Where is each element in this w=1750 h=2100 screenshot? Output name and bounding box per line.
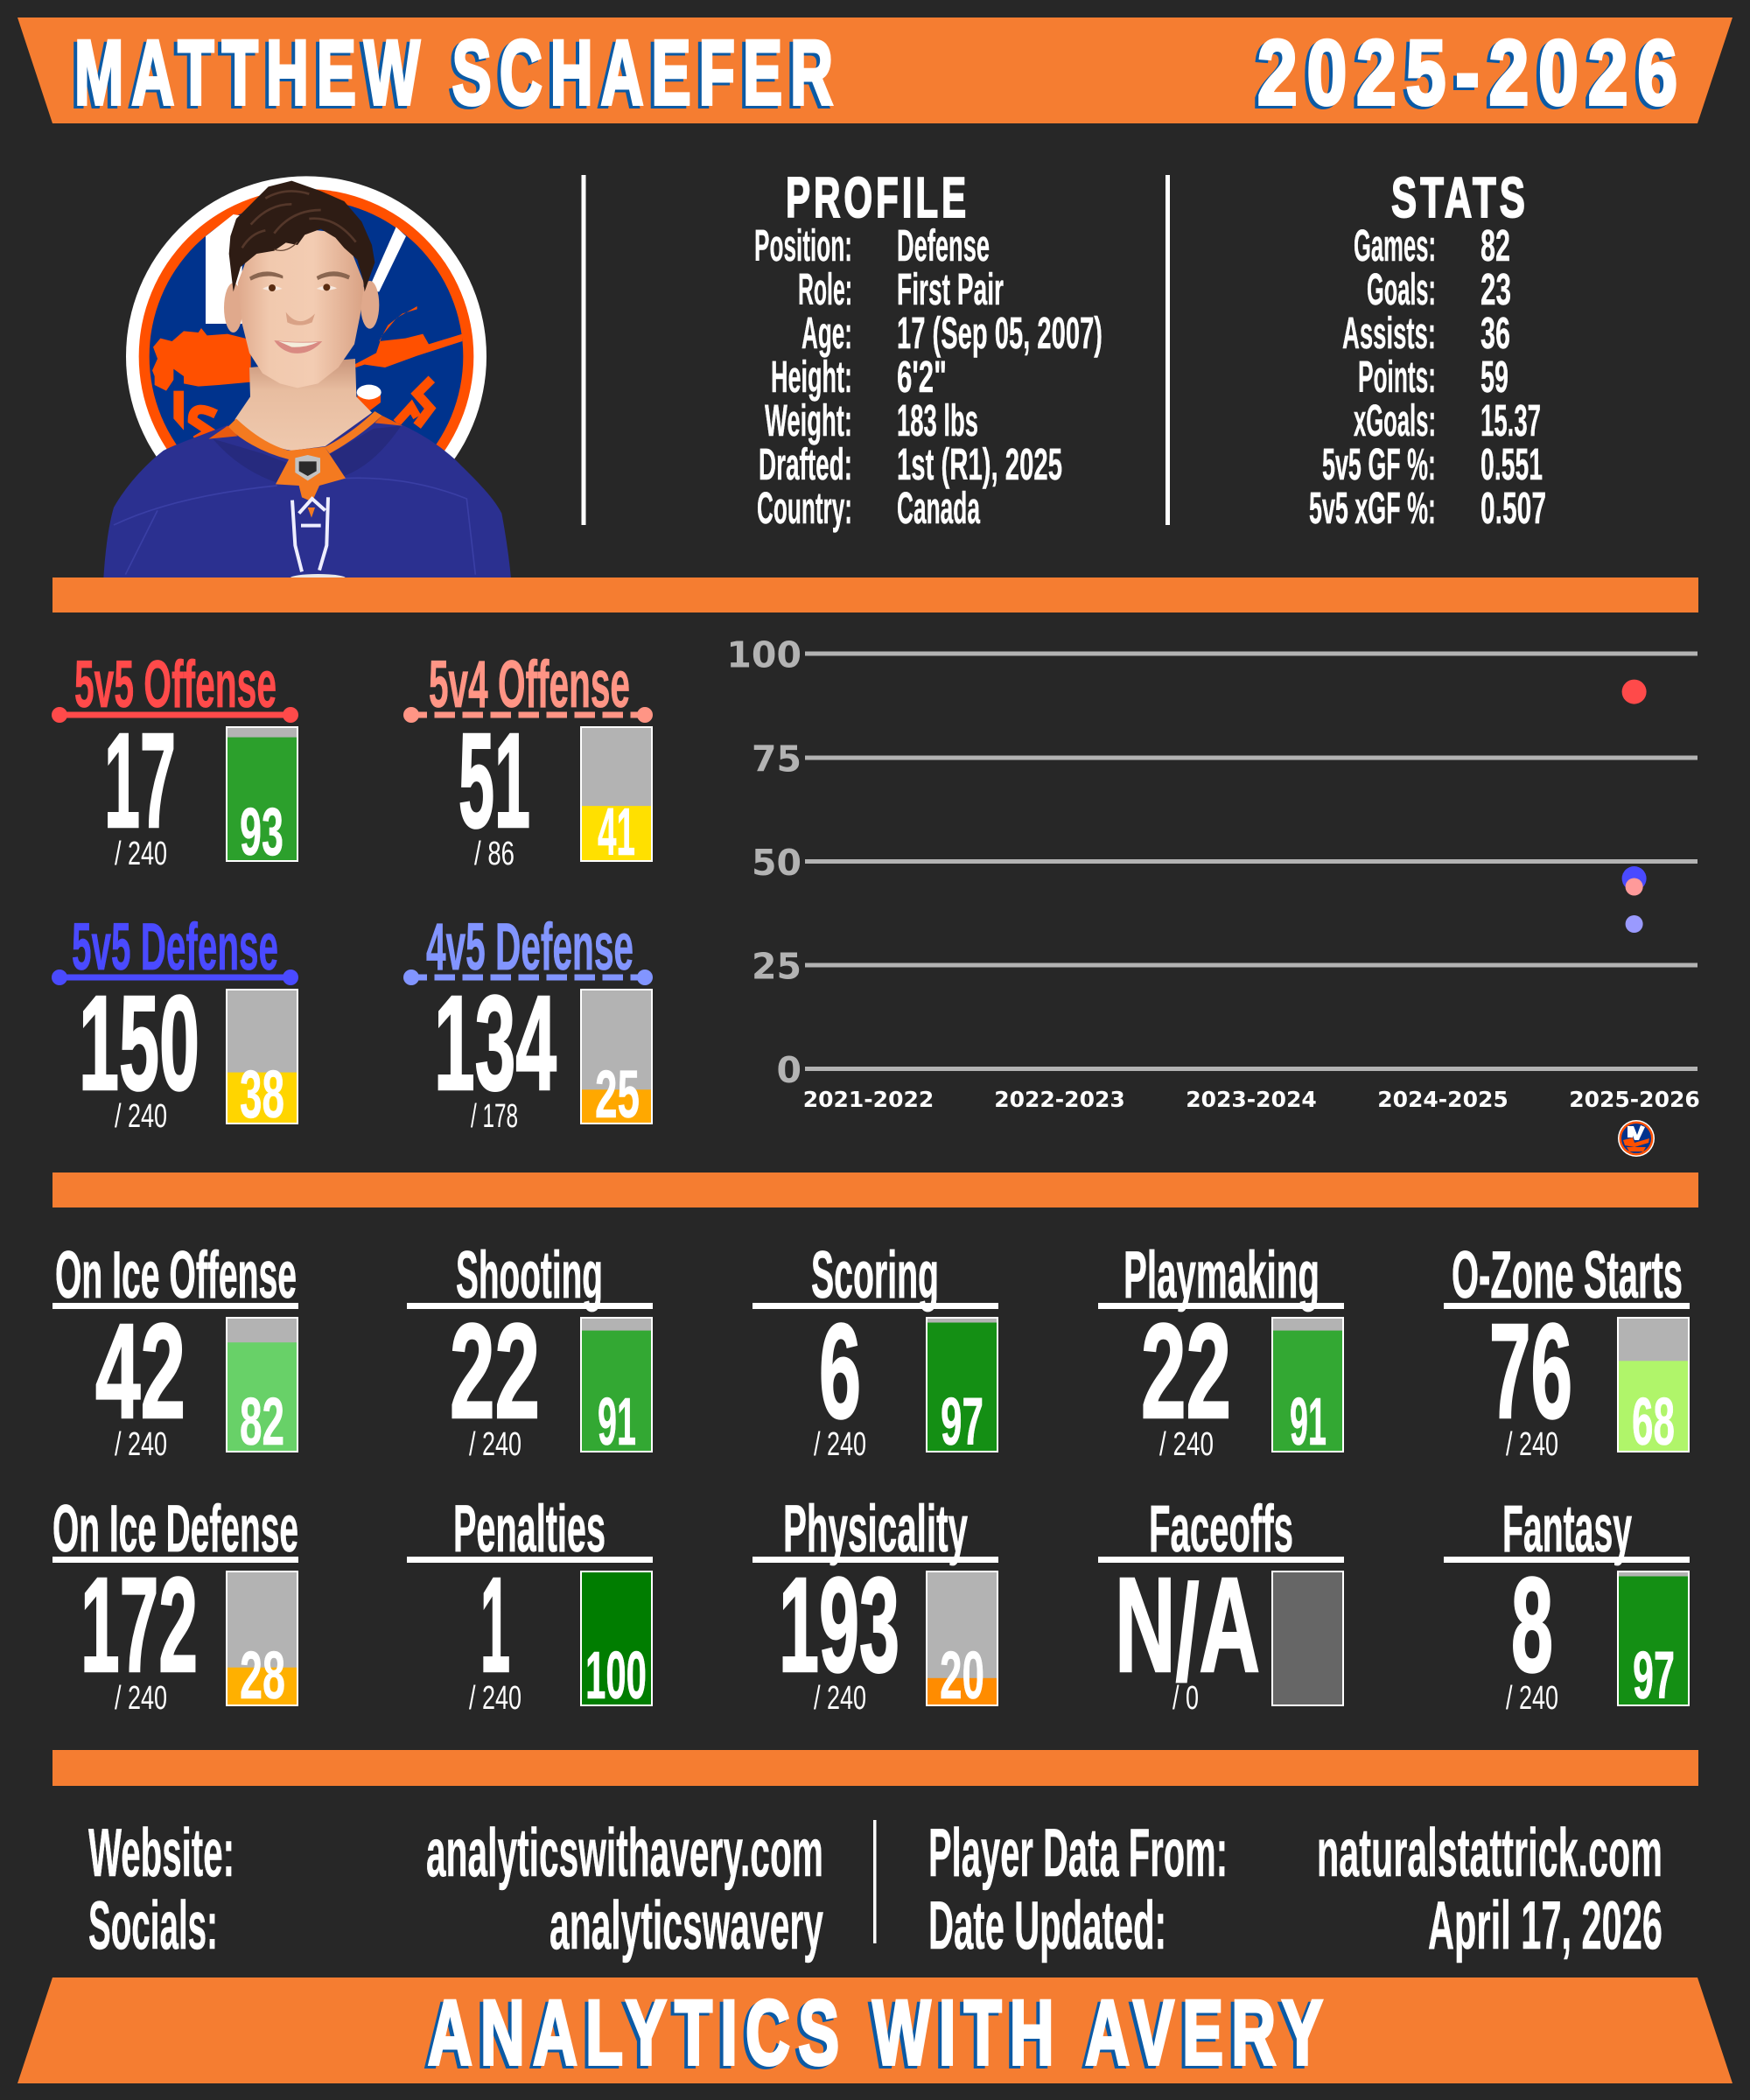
heading: Physicality <box>783 1492 968 1566</box>
percentile bar: 93 <box>240 794 284 870</box>
x axis labels <box>803 1087 1700 1112</box>
rank: 134 <box>434 968 556 1118</box>
panel: profile: Drafted: <box>759 439 852 489</box>
panel: on ice defense <box>52 1492 298 1717</box>
neck <box>234 359 372 451</box>
credits: left <box>88 1814 823 1964</box>
percentile bar <box>580 1317 653 1460</box>
panel: stats <box>1309 165 1546 533</box>
x axis labels: 2024-2025 <box>1377 1087 1508 1112</box>
orange band <box>52 1172 1698 1208</box>
y axis labels: 0 <box>776 1049 802 1091</box>
rank: 172 <box>80 1550 198 1700</box>
percentile bar <box>226 726 298 870</box>
rank: 76 <box>1489 1296 1572 1446</box>
heading: Playmaking <box>1124 1238 1320 1312</box>
rank: / <box>1176 1558 1199 1708</box>
panel: profile: Age: <box>802 308 852 358</box>
player name title: MATTHEW SCHAEFER <box>74 22 841 124</box>
rank total: / 240 <box>115 1680 167 1717</box>
panel: profile: Position: <box>754 220 852 270</box>
panel: playmaking <box>1098 1238 1344 1463</box>
percentile bar: 100 <box>585 1638 647 1713</box>
percentile bar: 38 <box>240 1057 284 1132</box>
mouth <box>274 340 322 354</box>
divider <box>581 175 586 525</box>
rank total: / 240 <box>115 1098 167 1135</box>
panel: stats: 0.507 <box>1480 483 1546 533</box>
credits: right <box>928 1814 1662 1964</box>
panel: stats: 15.37 <box>1480 396 1541 445</box>
x axis labels: 2022-2023 <box>994 1087 1125 1112</box>
rank: 22 <box>450 1296 540 1446</box>
NHL shield <box>295 455 320 480</box>
rank: A <box>1199 1550 1260 1700</box>
percentile bar <box>1271 1317 1344 1460</box>
panel: scoring <box>752 1238 998 1463</box>
percentile bar <box>580 726 653 870</box>
rank: 150 <box>79 968 200 1118</box>
panel: stats: Assists: <box>1342 308 1436 358</box>
legend line <box>52 707 298 723</box>
credits: right: Player Data From: <box>928 1814 1228 1891</box>
legend line <box>403 707 653 723</box>
legend line <box>52 970 298 985</box>
footer banner <box>18 1978 1732 2084</box>
y axis labels: 100 <box>726 634 802 676</box>
heading: Faceoffs <box>1149 1492 1293 1566</box>
percentile bar <box>926 1317 998 1460</box>
percentile bar: 28 <box>240 1638 285 1713</box>
rank: 193 <box>779 1550 900 1700</box>
y axis labels <box>726 634 802 1091</box>
rank total: / 240 <box>469 1680 522 1717</box>
x axis labels: 2021-2022 <box>803 1087 934 1112</box>
rank total: / 240 <box>1159 1426 1214 1463</box>
laces <box>292 497 328 571</box>
panel: physicality <box>752 1492 998 1717</box>
credits: left: analyticswithavery.com <box>426 1814 823 1891</box>
orange band <box>52 1750 1698 1786</box>
heading: 4v5 Defense <box>426 910 634 984</box>
panel: profile: 6'2" <box>897 352 947 402</box>
panel: 5v5 offense: 17 <box>104 705 176 856</box>
panel: stats: 0.551 <box>1480 439 1543 489</box>
panel: profile: First Pair <box>897 264 1004 314</box>
player portrait with team logo <box>103 176 511 582</box>
percentile bar <box>1617 1317 1690 1460</box>
brows <box>249 271 283 281</box>
jersey <box>103 414 511 578</box>
panel: profile: Canada <box>897 483 980 533</box>
nose <box>286 312 315 326</box>
panel: profile: 183 lbs <box>897 396 978 445</box>
percentile bar <box>1271 1571 1344 1706</box>
rank: 8 <box>1511 1550 1553 1700</box>
collar <box>228 411 382 501</box>
percentile bar <box>580 989 653 1132</box>
credits: left: Website: <box>88 1814 234 1891</box>
panel: stats: 23 <box>1480 264 1511 314</box>
panel: penalties: 1 <box>480 1550 510 1700</box>
heading: 5v5 Offense <box>74 648 276 722</box>
panel: faceoffs <box>1098 1492 1344 1717</box>
percentile bar: 20 <box>940 1638 984 1713</box>
panel: profile: Weight: <box>765 396 852 445</box>
heading: Penalties <box>453 1492 606 1566</box>
legend line <box>403 970 653 985</box>
panel: stats: Points: <box>1358 352 1436 402</box>
stats heading: STATS <box>1391 165 1529 229</box>
rank total: / 240 <box>115 1426 167 1463</box>
rank total: / 240 <box>1506 1426 1558 1463</box>
panel: shooting <box>407 1238 653 1463</box>
percentile bar: 25 <box>595 1057 640 1132</box>
panel: 4v5 defense <box>403 910 653 1135</box>
panel: on ice offense <box>52 1238 298 1463</box>
face <box>238 228 364 388</box>
percentile bar <box>926 1571 998 1713</box>
panel: 5v4 offense: 51 <box>458 705 530 856</box>
icon: team logo <box>1618 1120 1655 1157</box>
y axis labels: 25 <box>752 945 802 987</box>
percentile bar: 68 <box>1632 1384 1675 1460</box>
panel: profile: 17 (Sep 05, 2007) <box>897 308 1102 358</box>
heading: Shooting <box>456 1238 603 1312</box>
credits: left: Socials: <box>88 1886 218 1964</box>
panel: stats: xGoals: <box>1354 396 1436 445</box>
percentile bar: 82 <box>240 1384 284 1460</box>
divider <box>1166 175 1170 525</box>
heading: On Ice Defense <box>52 1492 298 1566</box>
panel: stats: 5v5 GF %: <box>1322 439 1436 489</box>
percentile bar: 97 <box>1633 1638 1675 1713</box>
percentile bar <box>226 989 298 1132</box>
panel: stats: 59 <box>1480 352 1508 402</box>
panel: 5v5 offense <box>52 648 298 872</box>
rank total: / 0 <box>1172 1680 1199 1717</box>
panel: profile: Role: <box>798 264 852 314</box>
heading: 5v4 Offense <box>429 648 630 722</box>
panel: stats: 36 <box>1480 308 1510 358</box>
rank: 6 <box>819 1296 861 1446</box>
rank total: / 86 <box>474 836 514 872</box>
panel: profile: Country: <box>757 483 852 533</box>
panel: profile: Defense <box>897 220 990 270</box>
chart: percentile by season <box>726 634 1700 1157</box>
rank: N <box>1115 1550 1212 1700</box>
rank total: / 240 <box>814 1680 866 1717</box>
heading: Fantasy <box>1502 1492 1632 1566</box>
eyes <box>262 286 283 290</box>
credits: left: analyticswavery <box>550 1886 823 1964</box>
rank total: / 178 <box>471 1098 518 1135</box>
rank total: / 240 <box>469 1426 522 1463</box>
heading: On Ice Offense <box>55 1238 297 1312</box>
panel: 5v4 offense <box>403 648 653 872</box>
heading: 5v5 Defense <box>72 910 278 984</box>
heading: Scoring <box>811 1238 939 1312</box>
rank: 42 <box>95 1296 186 1446</box>
y axis labels: 75 <box>752 738 802 780</box>
panel: stats: 5v5 xGF %: <box>1309 483 1436 533</box>
percentile bar <box>226 1571 298 1713</box>
y axis labels: 50 <box>752 842 802 884</box>
rank total: / 240 <box>1506 1680 1558 1717</box>
panel: fantasy <box>1444 1492 1690 1717</box>
panel: profile <box>754 165 1102 533</box>
percentile bar <box>226 1317 298 1460</box>
orange band <box>52 578 1698 612</box>
credits: right: Date Updated: <box>928 1886 1166 1964</box>
ears <box>224 283 242 332</box>
panel: penalties <box>407 1492 653 1717</box>
panel: stats: Goals: <box>1367 264 1436 314</box>
percentile bar <box>1617 1571 1690 1713</box>
data points <box>1622 680 1647 933</box>
percentile bar: 91 <box>598 1384 636 1460</box>
percentile bar: 97 <box>941 1384 984 1460</box>
panel: stats: 82 <box>1480 220 1510 270</box>
percentile bar: 41 <box>598 794 635 870</box>
footer title: ANALYTICS WITH AVERY <box>428 1982 1331 2084</box>
hair <box>229 181 374 291</box>
header banner <box>18 18 1732 124</box>
percentile bar <box>580 1571 653 1713</box>
x axis labels: 2025-2026 <box>1569 1087 1700 1112</box>
panel: 5v5 defense <box>52 910 298 1135</box>
profile heading: PROFILE <box>786 165 970 229</box>
rank: 22 <box>1141 1296 1231 1446</box>
panel: profile: 1st (R1), 2025 <box>897 439 1062 489</box>
panel: profile: Height: <box>771 352 852 402</box>
panel: stats: Games: <box>1354 220 1436 270</box>
percentile bar: 91 <box>1290 1384 1326 1460</box>
panel: o-zone starts <box>1444 1238 1690 1463</box>
x axis labels: 2023-2024 <box>1186 1087 1317 1112</box>
divider <box>873 1820 877 1943</box>
rank total: / 240 <box>115 836 167 872</box>
rank total: / 240 <box>814 1426 866 1463</box>
